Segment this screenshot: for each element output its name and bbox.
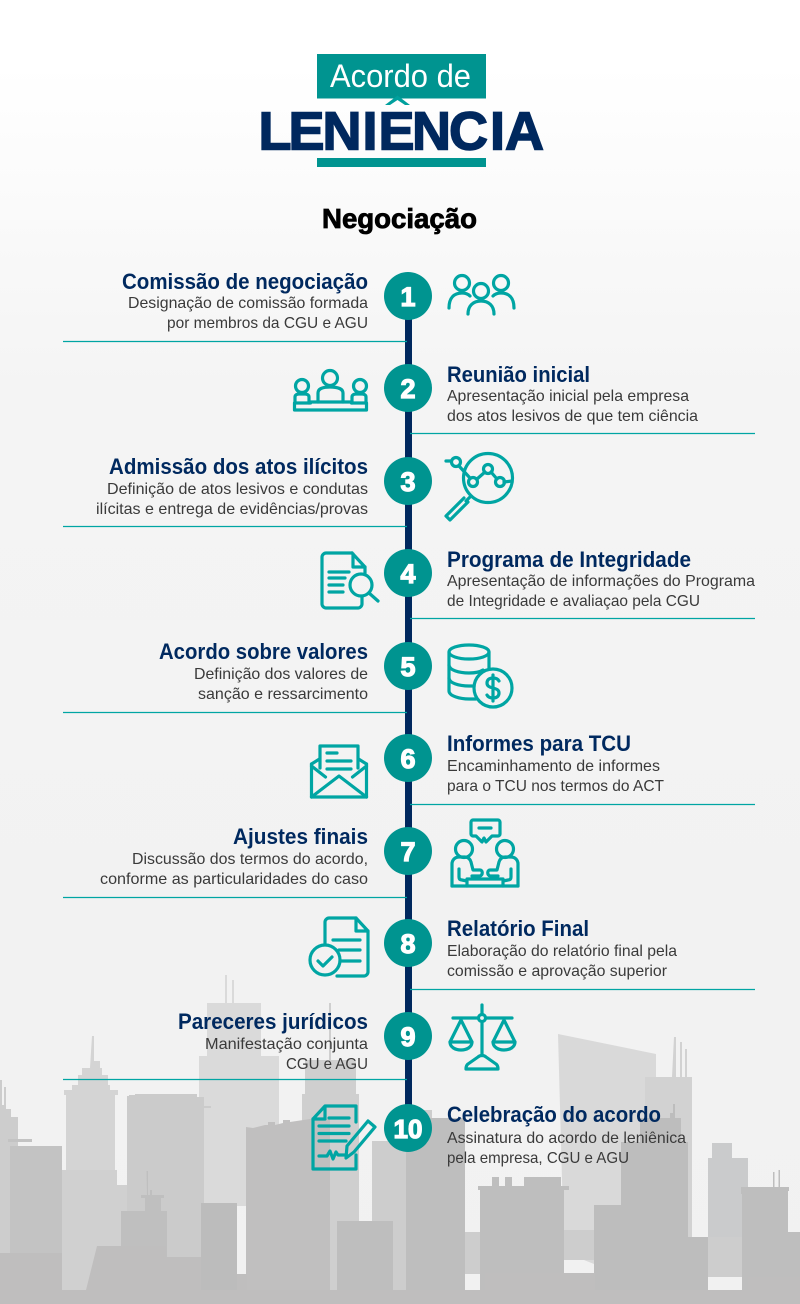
title line two: LENIÊNCIA xyxy=(258,100,544,162)
icon: coins xyxy=(449,645,512,707)
step 3 number: 3 xyxy=(400,467,416,497)
icon: approved document xyxy=(310,918,368,976)
step 4 text xyxy=(447,573,755,610)
step 9 heading: Pareceres jurídicos xyxy=(178,1009,368,1034)
step 4 number xyxy=(384,549,432,597)
step 10 xyxy=(313,1102,686,1169)
step 10 number: 10 xyxy=(394,1114,422,1144)
skyline xyxy=(0,975,800,1304)
title line one: Acordo de xyxy=(330,58,471,94)
step 1 text: por membros da CGU e AGU xyxy=(167,315,368,332)
step 6 xyxy=(312,731,755,804)
step 10 number xyxy=(384,1104,432,1152)
step 1 text xyxy=(128,295,368,332)
step 4 number: 4 xyxy=(400,559,416,589)
step 5 number: 5 xyxy=(400,652,416,682)
title xyxy=(258,54,544,167)
step 2 xyxy=(294,362,755,434)
step 8 text: Elaboração do relatório final pela xyxy=(447,943,677,960)
step 9 text xyxy=(205,1036,368,1073)
step 4 text: Apresentação de informações do Programa xyxy=(447,573,755,590)
step 7 xyxy=(63,820,518,898)
step 4 heading: Programa de Integridade xyxy=(447,547,691,572)
icon: envelope xyxy=(312,746,366,797)
icon: document search xyxy=(322,553,378,608)
step 6 heading: Informes para TCU xyxy=(447,731,631,756)
step 2 number xyxy=(384,364,432,412)
icon: scales xyxy=(450,1005,515,1069)
step 3 text: ilícitas e entrega de evidências/provas xyxy=(96,501,368,518)
step 6 text xyxy=(447,758,664,795)
step 2 text: Apresentação inicial pela empresa xyxy=(447,388,689,405)
step 1 number xyxy=(384,272,432,320)
step 7 number xyxy=(384,827,432,875)
step 5 text xyxy=(194,666,368,703)
step 5 text: sanção e ressarcimento xyxy=(198,686,368,703)
icon: conversation xyxy=(452,820,518,886)
step 3 text: Definição de atos lesivos e condutas xyxy=(107,481,368,498)
step 7 heading: Ajustes finais xyxy=(233,824,368,849)
step 1 number: 1 xyxy=(400,282,416,312)
step 10 text: pela empresa, CGU e AGU xyxy=(447,1150,629,1167)
step 9 number xyxy=(384,1012,432,1060)
step 5 text: Definição dos valores de xyxy=(194,666,368,683)
timeline spine xyxy=(405,296,412,1128)
step 7 text xyxy=(100,851,368,888)
step 10 text: Assinatura do acordo de leniênica xyxy=(447,1130,686,1147)
step 5 number xyxy=(384,642,432,690)
title underline xyxy=(317,158,486,167)
step 9 number: 9 xyxy=(400,1022,416,1052)
step 8 text xyxy=(447,943,677,980)
step 8 text: comissão e aprovação superior xyxy=(447,963,668,980)
icon: people xyxy=(449,276,514,314)
step 9 xyxy=(63,1005,515,1080)
step 7 text: Discussão dos termos do acordo, xyxy=(132,851,368,868)
step 2 text xyxy=(447,388,698,425)
step 6 text: Encaminhamento de informes xyxy=(447,758,660,775)
step 10 heading: Celebração do acordo xyxy=(447,1102,661,1127)
icon: magnifier chart xyxy=(446,454,512,520)
icon: signed contract xyxy=(313,1106,375,1169)
step 8 heading: Relatório Final xyxy=(447,916,589,941)
step 6 text: para o TCU nos termos do ACT xyxy=(447,778,664,795)
section heading: Negociação xyxy=(322,203,477,234)
step 2 text: dos atos lesivos de que tem ciência xyxy=(447,408,698,425)
step 1 text: Designação de comissão formada xyxy=(128,295,368,312)
step 7 text: conforme as particularidades do caso xyxy=(100,871,368,888)
step 8 number: 8 xyxy=(400,929,416,959)
step 6 number: 6 xyxy=(400,744,416,774)
step 2 number: 2 xyxy=(400,374,416,404)
step 3 number xyxy=(384,457,432,505)
step 7 number: 7 xyxy=(400,837,416,867)
circumflex accent xyxy=(385,96,410,105)
step 3 heading: Admissão dos atos ilícitos xyxy=(109,454,368,479)
step 3 xyxy=(63,454,512,526)
step 1 heading: Comissão de negociação xyxy=(122,269,368,294)
step 9 text: Manifestação conjunta xyxy=(205,1036,368,1053)
step 1 xyxy=(63,269,514,342)
step 5 xyxy=(63,639,512,712)
step 4 xyxy=(322,547,755,618)
step 3 text xyxy=(96,481,368,518)
step 6 number xyxy=(384,734,432,782)
step 4 text: de Integridade e avaliaçao pela CGU xyxy=(447,593,700,610)
step 8 number xyxy=(384,919,432,967)
step 9 text: CGU e AGU xyxy=(286,1056,368,1073)
icon: meeting table xyxy=(294,370,366,410)
step 8 xyxy=(310,916,755,990)
step 5 heading: Acordo sobre valores xyxy=(159,639,368,664)
step 2 heading: Reunião inicial xyxy=(447,362,590,387)
step 10 text xyxy=(447,1130,686,1167)
title banner xyxy=(317,54,486,98)
